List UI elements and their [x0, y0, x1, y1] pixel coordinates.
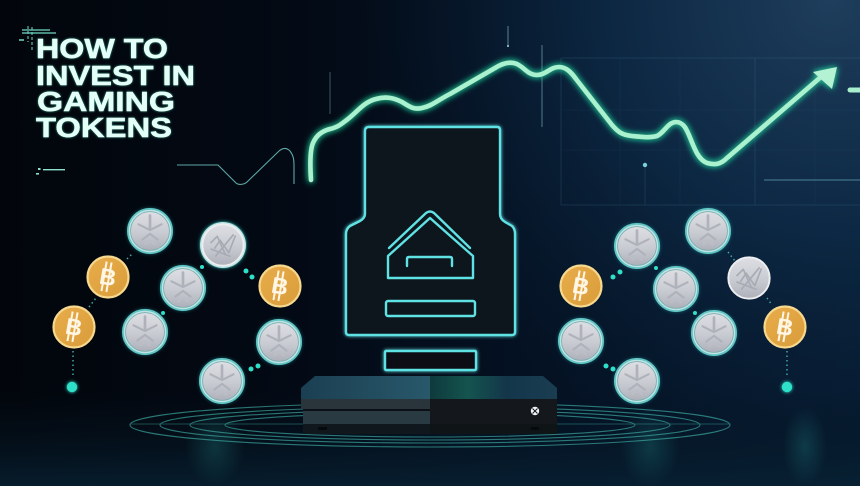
icon: house roof — [388, 212, 473, 278]
bitcoin coin — [764, 306, 806, 348]
title — [36, 33, 195, 143]
lower bar — [385, 351, 476, 370]
left coin connectors — [67, 254, 260, 392]
bitcoin coin — [560, 266, 602, 306]
right coins — [558, 208, 806, 404]
inner bar — [386, 301, 475, 316]
left coins — [54, 208, 302, 404]
title: HOW TO — [36, 33, 168, 64]
bitcoin coin — [260, 266, 300, 306]
title: TOKENS — [36, 112, 172, 143]
rising line chart with arrow — [310, 63, 837, 180]
light bar under console — [429, 440, 431, 463]
small dash mark under title — [36, 168, 65, 175]
title: INVEST IN — [36, 60, 195, 91]
concentric floor rings — [130, 403, 730, 447]
bitcoin coin: B — [98, 263, 118, 291]
bitcoin coin: B — [775, 313, 795, 341]
right coin connectors — [604, 252, 792, 392]
left mini line — [177, 148, 294, 184]
neon card icon — [346, 127, 515, 370]
bitcoin coin: B — [270, 272, 290, 300]
chart grid — [561, 58, 860, 205]
accent lines and dot — [330, 26, 860, 180]
bitcoin coin: B — [64, 313, 84, 341]
game console — [301, 376, 557, 434]
bitcoin coin — [88, 256, 128, 298]
title: GAMING — [37, 86, 175, 117]
icon: console logo — [531, 407, 539, 415]
bitcoin coin: B — [571, 272, 591, 300]
bitcoin coin — [54, 306, 94, 348]
title decoration — [19, 26, 56, 50]
